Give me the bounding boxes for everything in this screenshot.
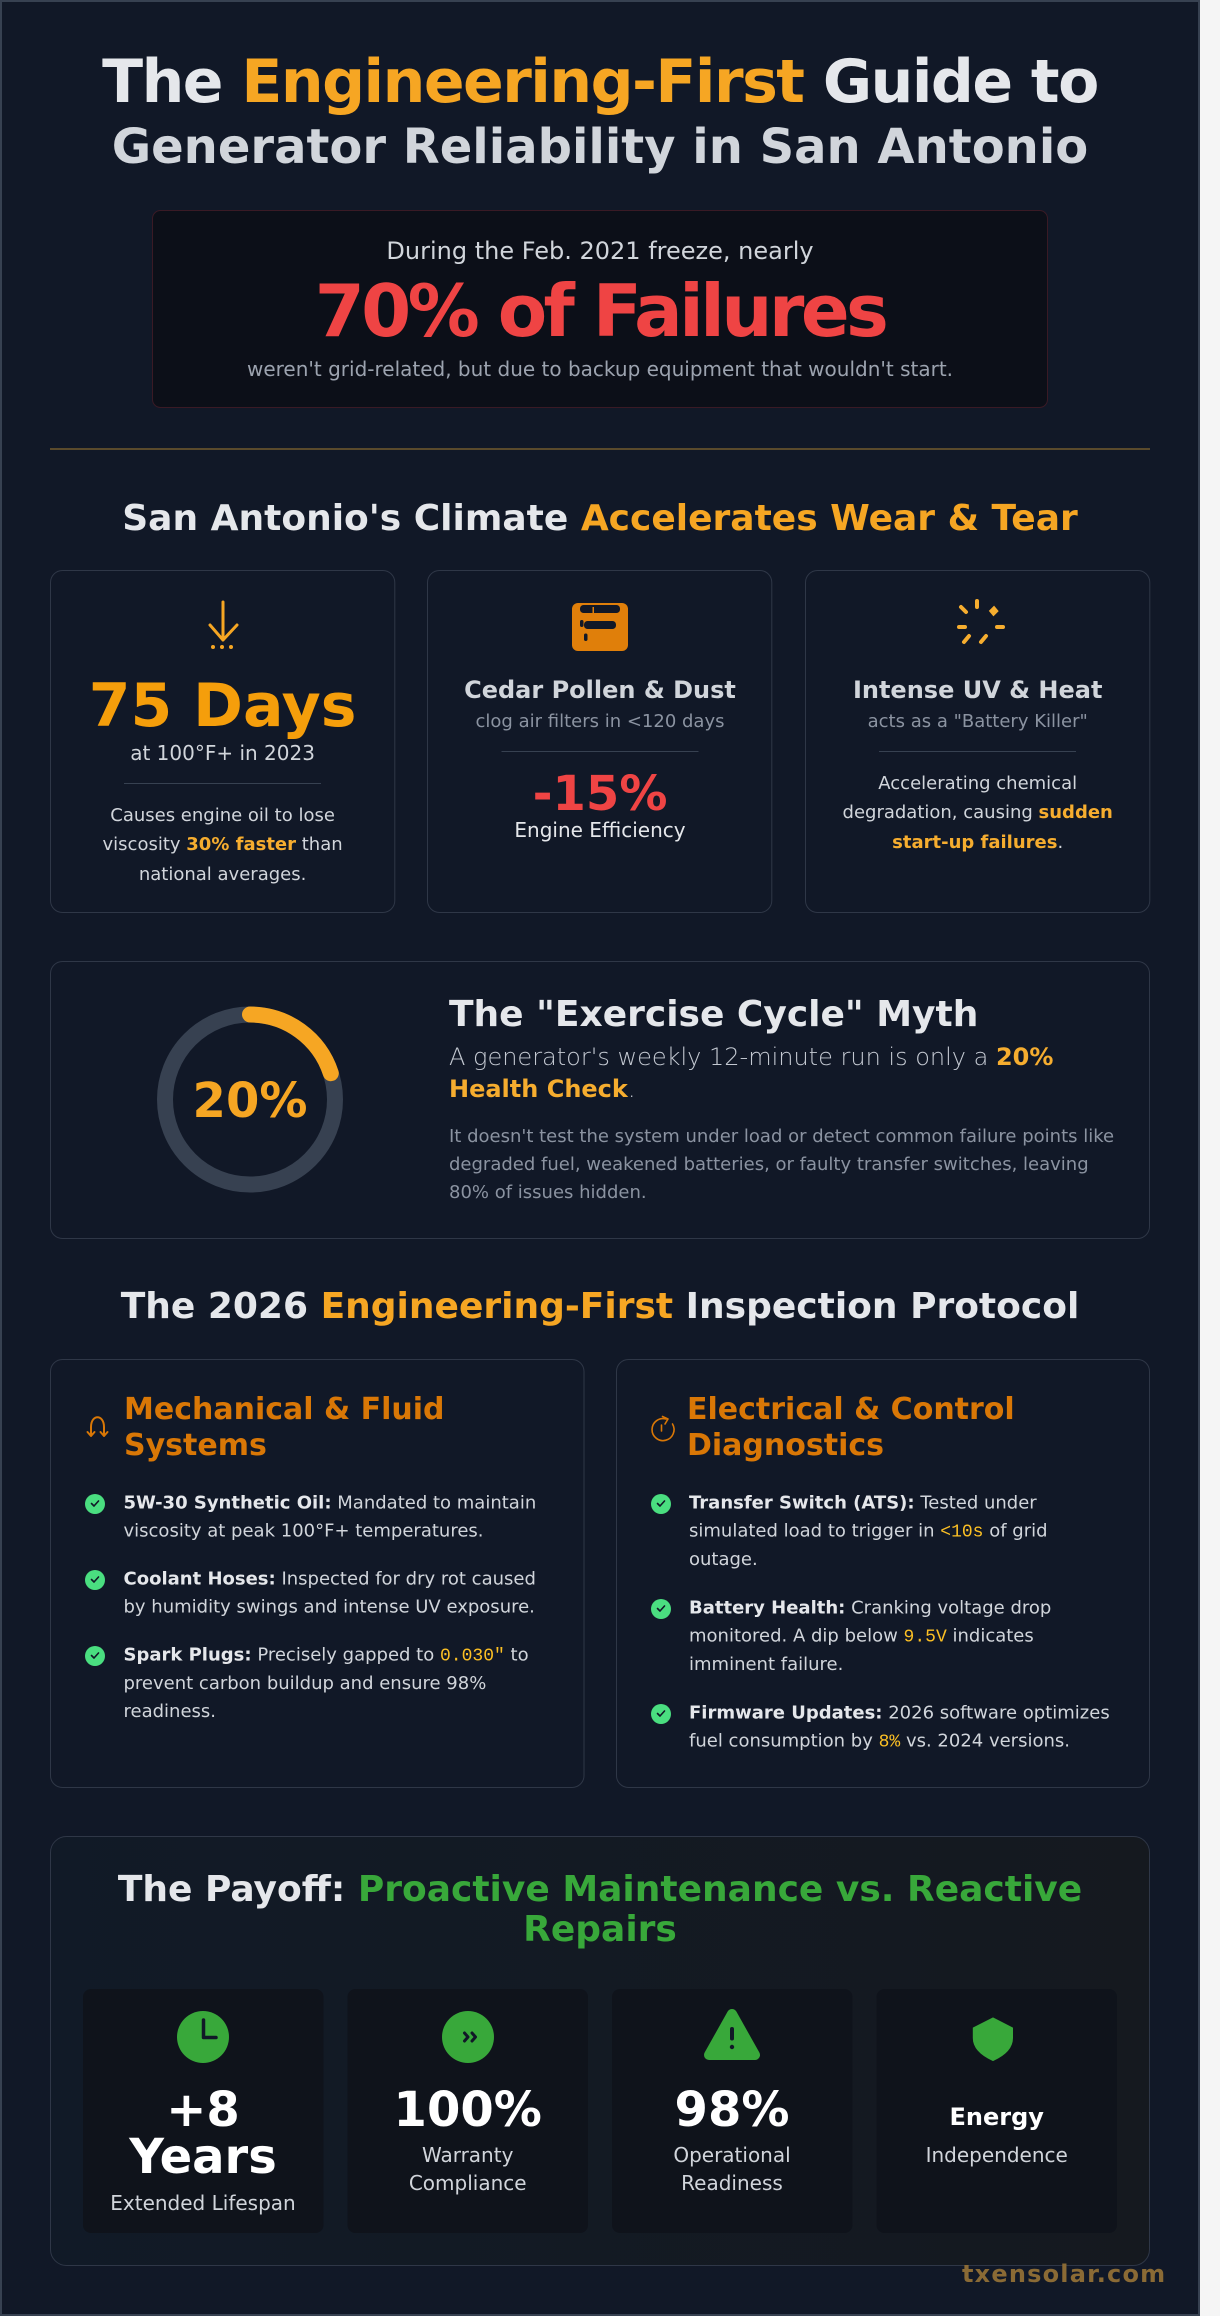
list item: battery [651,1598,1051,1675]
stat: 75 days: 75 Days [89,671,356,741]
heading: Repairs [523,1909,677,1950]
list item: battery: Battery Health: Cranking voltage drop [689,1598,1051,1618]
metric label [409,2143,527,2195]
metric card: warranty [348,1989,588,2233]
list item: spark plugs: Spark Plugs: Precisely gapped to 0.030" to [124,1644,529,1666]
panel: exercise cycle myth [50,962,1150,1238]
metric label: Operational [673,2143,791,2167]
stat caption: at 100°F+ in 2023 [130,741,315,765]
heading [124,1392,444,1463]
heading: Cedar Pollen & Dust [464,676,736,704]
description: start-up failures. [892,832,1063,853]
chart: 20% donut [165,1014,335,1184]
heading: climate: San Antonio's Climate Accelerates Wear & Tear [122,498,1078,539]
icon: loop arrows [88,1417,108,1436]
callout: 70% of failures: During the Feb. 2021 freeze, nearly [386,237,814,265]
title: The Engineering-First Guide to [102,47,1098,117]
metric value: Energy [949,2103,1044,2131]
metric value: 98% [675,2082,789,2138]
list item: oil [85,1492,536,1542]
list item: firmware: fuel consumption by 8% vs. 2024 versions. [689,1730,1070,1752]
list item: transfer switch: Transfer Switch (ATS): Tested under [689,1492,1037,1514]
callout: 70% of failures: 70% of Failures [315,269,886,353]
metric card: energy independence [876,1989,1117,2233]
list item: battery: monitored. A dip below 9.5V indicates [689,1626,1034,1648]
panel: UV and heat [806,570,1150,912]
list item: transfer switch: outage. [689,1549,758,1570]
subheading: acts as a "Battery Killer" [868,711,1088,732]
metric label: Warranty [422,2143,514,2167]
list item: spark plugs: readiness. [124,1701,216,1722]
list item: hoses: by humidity swings and intense UV exposure. [124,1596,535,1618]
description: Accelerating chemical [878,773,1077,794]
list item: transfer switch [651,1492,1048,1570]
heading: Mechanical & Fluid [124,1392,444,1427]
callout: 70% of failures: weren't grid-related, but due to backup equipment that wouldn't start. [247,357,953,381]
panel: the payoff [50,1836,1150,2266]
description: degradation, causing sudden [843,802,1113,823]
heading: Intense UV & Heat [853,676,1102,704]
subheading: clog air filters in <120 days [476,711,724,732]
metric value [128,2082,277,2185]
panel: 75 days [50,570,395,912]
heading: Diagnostics [687,1428,884,1463]
heading: The "Exercise Cycle" Myth [449,994,978,1035]
icon: sun rays [959,601,1003,642]
subheading: A generator's weekly 12-minute run is only a 20% [449,1043,1053,1071]
list item: firmware: Firmware Updates: 2026 software optimizes [689,1702,1110,1724]
list item: hoses: Coolant Hoses: Inspected for dry rot caused [124,1568,536,1590]
title: Generator Reliability in San Antonio [112,119,1088,175]
description [449,1126,1114,1203]
list item: spark plugs [85,1644,529,1722]
icon: down arrow [210,602,237,649]
metric card: lifespan [83,1989,324,2233]
heading [687,1392,1015,1463]
metric label: Independence [926,2143,1068,2167]
watermark: txensolar.com [962,2260,1166,2288]
metric label [673,2143,791,2195]
panel: mechanical and fluid [50,1360,584,1788]
metric label: Readiness [681,2171,783,2195]
heading [118,1869,1082,1950]
subheading [449,1043,1053,1103]
heading: The Payoff: Proactive Maintenance vs. Reactive [118,1869,1082,1910]
list item: battery: imminent failure. [689,1654,843,1675]
list item: oil: 5W-30 Synthetic Oil: Mandated to maintain [124,1492,536,1514]
metric value: Years [128,2129,277,2185]
stat: -15%: -15% [533,766,667,822]
metric label: Compliance [409,2171,527,2195]
chart: 20% donut: 20% [193,1073,307,1129]
icon: warning [709,2014,755,2055]
heading: protocol: The 2026 Engineering-First Inspection Protocol [121,1286,1079,1327]
icon: chevrons [442,2011,494,2063]
list item: spark plugs: prevent carbon buildup and ensure 98% [124,1673,486,1694]
list item: hoses [85,1568,536,1618]
metric label: Extended Lifespan [110,2191,296,2215]
description [103,805,343,885]
stat caption: Engine Efficiency [514,818,686,842]
metric card: readiness [612,1989,852,2233]
icon: power cycle [652,1416,674,1441]
metric value: +8 [166,2082,240,2138]
icon: filter [572,603,628,651]
description: Causes engine oil to lose [110,805,335,826]
callout: 70% of failures [152,210,1048,408]
description [843,773,1113,853]
description: national averages. [139,864,306,885]
description: 80% of issues hidden. [449,1182,647,1203]
icon: clock [177,2011,229,2063]
description: It doesn't test the system under load or detect common failure points like [449,1126,1114,1147]
subheading: Health Check. [449,1075,636,1103]
list item: transfer switch: simulated load to trigger in <10s of grid [689,1520,1048,1542]
heading: Electrical & Control [687,1392,1015,1427]
panel: cedar pollen [428,570,772,912]
description: degraded fuel, weakened batteries, or faulty transfer switches, leaving [449,1154,1089,1175]
icon: shield [973,2018,1012,2060]
description: viscosity 30% faster than [103,834,343,855]
list item: firmware [651,1702,1110,1752]
metric value: 100% [394,2082,542,2138]
title [102,47,1098,175]
list item: oil: viscosity at peak 100°F+ temperatures. [124,1520,484,1542]
panel: electrical and control [616,1360,1150,1788]
heading: Systems [124,1428,267,1463]
